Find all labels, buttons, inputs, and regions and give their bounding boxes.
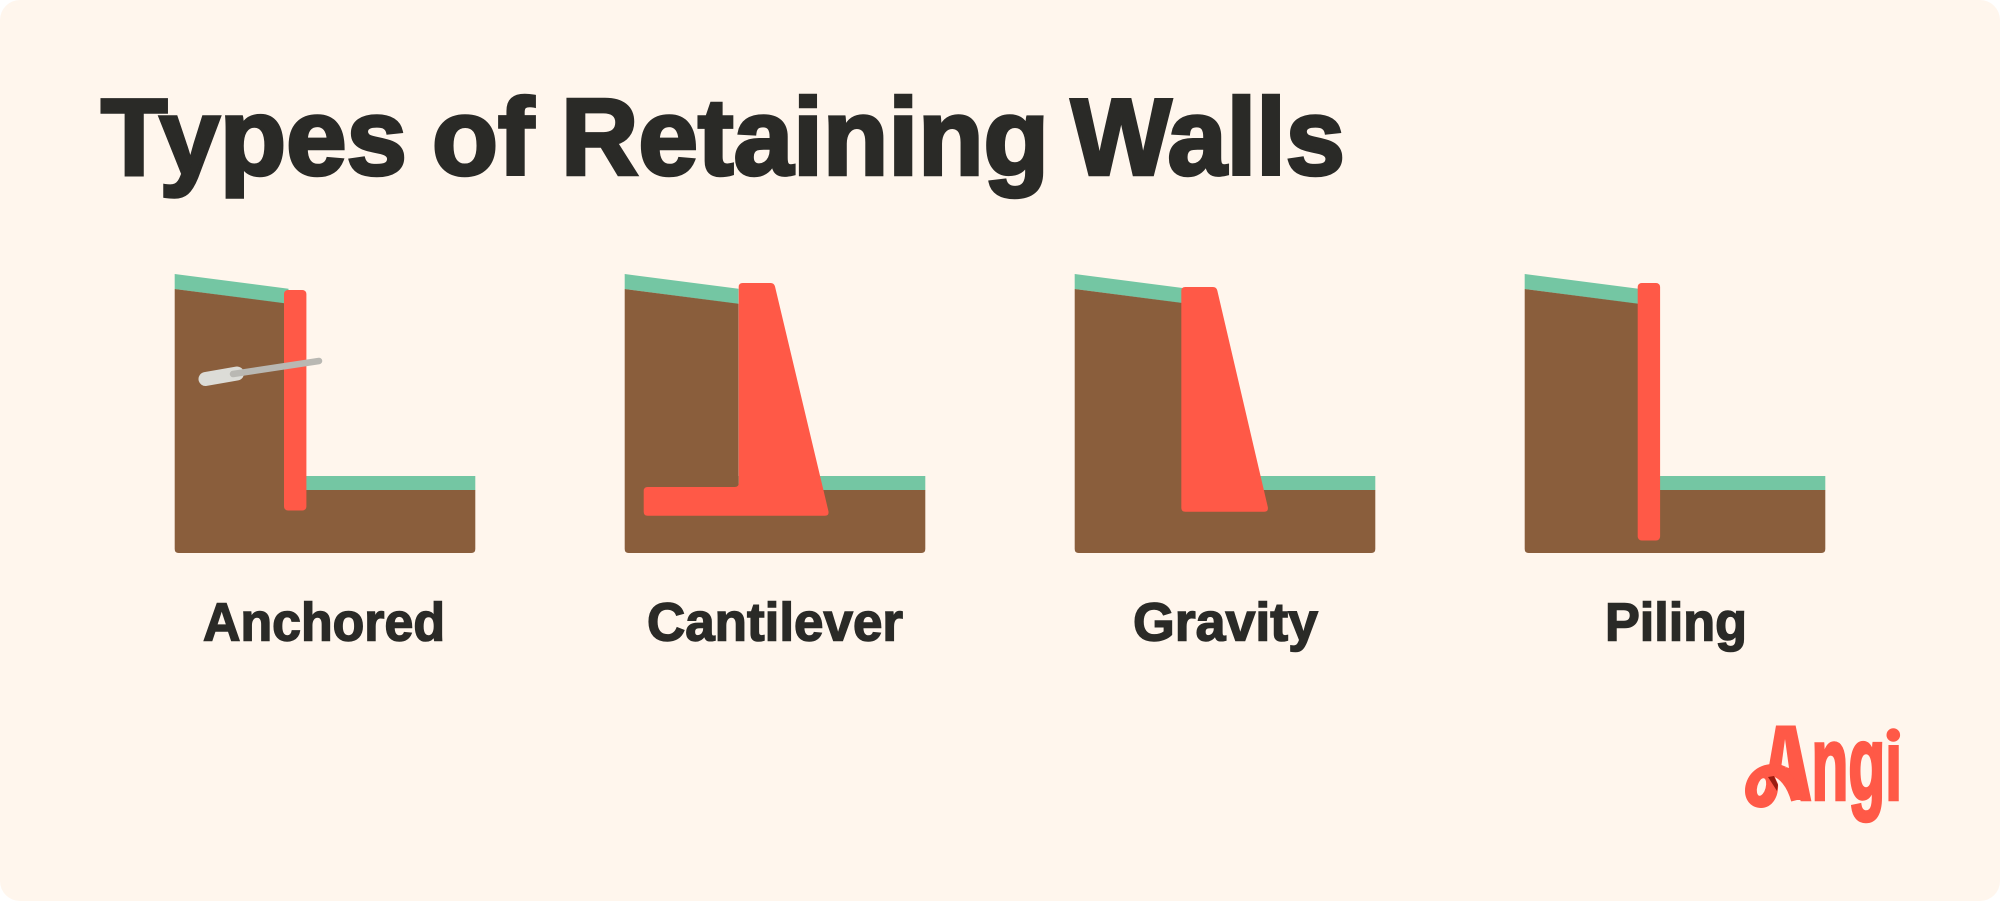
logo: Angi bbox=[1745, 706, 1902, 822]
cantilever wall bbox=[644, 283, 829, 516]
anchor plate bbox=[206, 374, 237, 379]
title: Retaining bbox=[561, 76, 1049, 198]
label: Cantilever: Cantilever bbox=[647, 592, 903, 652]
lower grass bbox=[288, 476, 475, 490]
logo leg ribbon bbox=[1770, 770, 1797, 800]
logo loop bbox=[1745, 764, 1778, 808]
upper grass bbox=[1525, 274, 1638, 304]
lower grass bbox=[738, 476, 925, 490]
lower grass bbox=[1638, 476, 1825, 490]
anchor rod bbox=[233, 361, 319, 374]
logo i dot cover bbox=[1884, 716, 1902, 745]
panel: anchored wall diagram bbox=[175, 274, 475, 553]
piling wall bbox=[1638, 283, 1660, 540]
logo loop hole bbox=[1755, 777, 1768, 797]
soil bbox=[1525, 289, 1825, 553]
logo i dot bbox=[1886, 728, 1900, 742]
title: Types bbox=[101, 76, 407, 198]
label: Anchored: Anchored bbox=[203, 592, 445, 652]
label: Gravity: Gravity bbox=[1133, 592, 1318, 652]
logo A counter bbox=[1782, 739, 1789, 768]
upper grass bbox=[175, 274, 288, 304]
logo A stem thickening bbox=[1769, 726, 1806, 800]
panel: cantilever wall diagram bbox=[625, 274, 925, 553]
upper grass bbox=[1075, 274, 1188, 304]
lower grass bbox=[1188, 476, 1375, 490]
gravity wall bbox=[1181, 287, 1268, 512]
logo loop shadow bbox=[1768, 776, 1778, 791]
upper grass bbox=[625, 274, 738, 304]
panel: piling wall diagram bbox=[1525, 274, 1825, 553]
anchored wall bbox=[284, 290, 306, 510]
soil bbox=[175, 289, 475, 553]
logo foot cover bbox=[1755, 772, 1791, 806]
soil bbox=[625, 289, 925, 553]
panel: gravity wall diagram bbox=[1075, 274, 1375, 553]
soil bbox=[1075, 289, 1375, 553]
label: Piling: Piling bbox=[1605, 592, 1747, 652]
logo wordmark: Angi bbox=[1768, 706, 1902, 822]
title: of bbox=[432, 76, 535, 198]
title: Walls bbox=[1071, 76, 1345, 198]
